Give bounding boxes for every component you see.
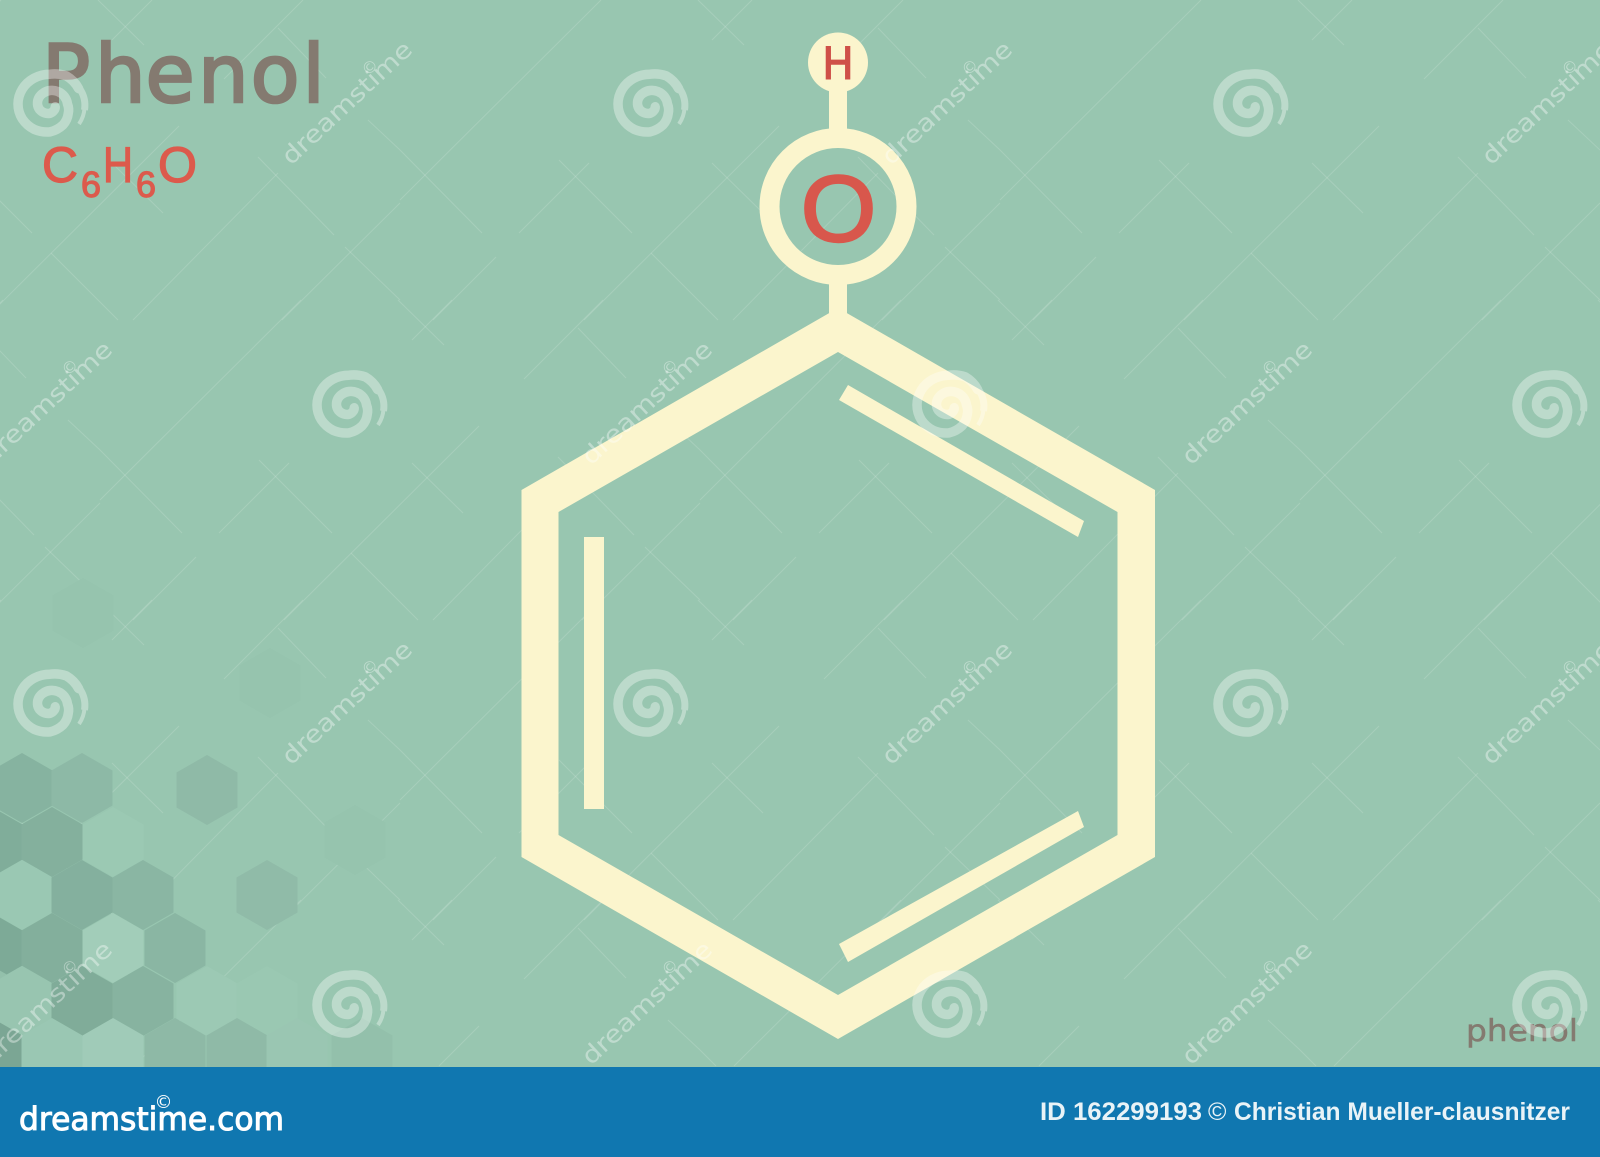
watermark text: © [657,355,682,380]
title: Phenol [42,28,325,121]
chemical formula [42,137,197,205]
chemical formula: O [158,137,197,193]
chemical formula: C [42,137,78,193]
watermark text: dreamstime [876,35,1018,170]
footer logo text: dreamstime.com [19,1100,284,1138]
bond: ring to oxygen [829,278,847,322]
watermark text: © [1257,955,1282,980]
image id and credit [1040,1098,1570,1126]
chemical formula: 6 [81,164,101,205]
watermark text: © [657,955,682,980]
oxygen atom circle [770,138,906,275]
watermark text: © [57,955,82,980]
watermark text: dreamstime [876,635,1018,770]
image id and credit: Christian Mueller-clausnitzer [1234,1098,1570,1126]
chemical formula: 6 [136,164,156,205]
watermark text: dreamstime [276,635,418,770]
footer band [0,1067,1600,1157]
footer logo spiral mark: © [154,1092,172,1113]
watermark text: dreamstime [576,335,718,470]
watermark text: © [957,655,982,680]
watermark text: dreamstime [1476,35,1600,170]
bottom-right caption: phenol [1466,1014,1578,1049]
watermark text: © [57,355,82,380]
double bond: lower right [839,811,1084,962]
watermark text: dreamstime [1176,935,1318,1070]
watermark text: dreamstime [1476,635,1600,770]
watermark text: © [1557,55,1582,80]
double bond: left [584,537,604,809]
hydrogen label: H [823,37,853,89]
watermark text: © [1557,655,1582,680]
chemical formula: H [103,137,133,193]
phenol molecule structure [522,32,1155,1039]
watermark text: dreamstime [276,35,418,170]
double bond: upper right [839,385,1084,537]
watermark text: dreamstime [576,935,718,1070]
image id and credit: © [1208,1098,1227,1126]
watermark text: © [357,655,382,680]
watermark text: © [1257,355,1282,380]
hydrogen atom circle [808,32,868,92]
hexagon cluster decoration [0,578,392,1088]
watermark text: dreamstime [1176,335,1318,470]
oxygen label: O [801,156,876,261]
watermark text: © [957,55,982,80]
image id and credit: ID 162299193 [1040,1098,1202,1126]
watermark text: © [357,55,382,80]
bond: oxygen to hydrogen [829,85,847,135]
benzene ring [522,308,1155,1039]
